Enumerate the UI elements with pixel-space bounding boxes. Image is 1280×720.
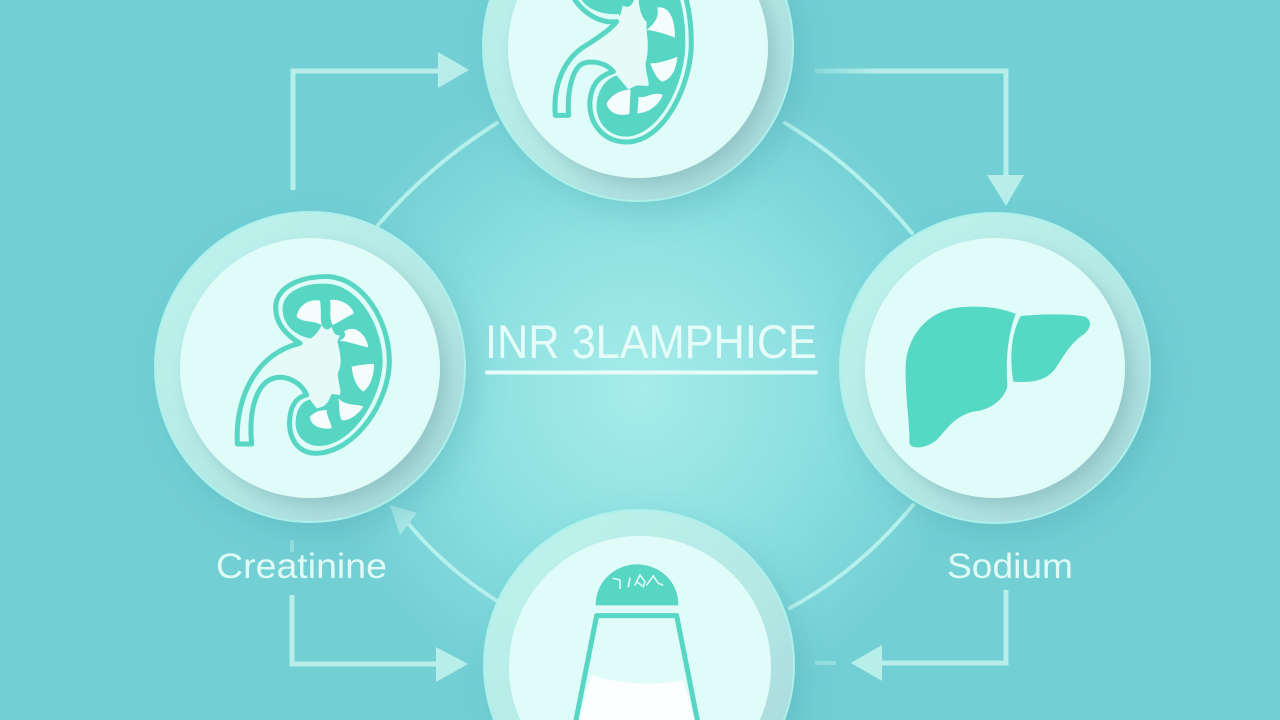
infographic canvas (154, 0, 1158, 720)
central glow (280, 60, 1000, 720)
label: Sodium: Sodium (947, 547, 1073, 586)
title: INR 3LAMPHICE (485, 315, 817, 368)
title underline (485, 370, 818, 374)
icon: kidney (top) (555, 0, 691, 142)
arrow: top left (293, 52, 469, 190)
arrow: bottom right (815, 590, 1006, 681)
circle: left kidney (155, 212, 465, 522)
label: Creatinine: Creatinine (216, 547, 387, 586)
circle: bottom salt shaker (484, 510, 794, 720)
icon: kidney (left) (237, 277, 389, 453)
icon: salt shaker (573, 564, 700, 720)
arrowhead: lower-left arc (390, 505, 417, 535)
arrow: bottom left (292, 540, 468, 682)
icon: liver (906, 307, 1090, 447)
connector arcs between circles (378, 123, 913, 608)
circle: right liver (840, 213, 1150, 523)
circle: top kidney (483, 0, 793, 201)
arrow: top right (815, 71, 1024, 206)
